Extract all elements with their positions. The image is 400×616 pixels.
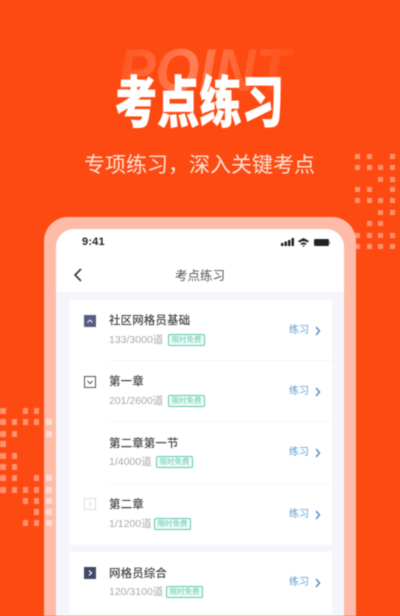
- arrow: [315, 448, 321, 458]
- row: 社区网格员基础: 练习: [289, 325, 309, 336]
- arrow: [315, 326, 321, 336]
- card: 网格员综合: 120/3100道: [109, 586, 163, 598]
- row: 社区网格员基础: [83, 314, 321, 347]
- row: 第一章: 练习: [289, 386, 309, 397]
- row: 第二章第一节: 限时免费: [160, 457, 190, 466]
- row: 第二章: 1/1200道: [109, 518, 152, 530]
- card: 网格员综合: 网格员综合: [109, 568, 167, 580]
- arrow: [315, 510, 321, 520]
- row: 第一章: 201/2600道: [109, 395, 163, 407]
- row: 第二章: [84, 498, 321, 531]
- phone screen: [56, 229, 344, 616]
- phone frame: [44, 217, 356, 616]
- card: 网格员综合: 练习: [289, 577, 309, 588]
- row: 第二章第一节: 1/4000道: [109, 456, 152, 468]
- card: 网格员综合: 限时免费: [170, 587, 200, 596]
- row: 第二章: 第二章: [109, 499, 144, 511]
- icon: expand: [83, 375, 97, 389]
- arrow: [315, 387, 321, 397]
- title: 考点练习: [115, 59, 284, 140]
- row: 第二章第一节: 练习: [289, 447, 309, 458]
- status icons: [280, 237, 331, 248]
- row: 社区网格员基础: 133/3000道: [109, 334, 163, 346]
- card: 社区网格员基础 chapters: [69, 300, 332, 545]
- icon: collapse: [83, 314, 97, 328]
- card: 网格员综合: [69, 552, 332, 614]
- row: 第一章: 第一章: [109, 376, 144, 388]
- row: 第一章: 限时免费: [172, 396, 202, 405]
- frame dots overlay: [46, 418, 52, 526]
- row: 社区网格员基础: 社区网格员基础: [109, 315, 190, 327]
- row: 第二章: 限时免费: [158, 519, 188, 528]
- row: 第二章第一节: 第二章第一节: [109, 438, 179, 450]
- row: 第二章第一节: [109, 436, 321, 469]
- back arrow: [73, 268, 82, 282]
- subtitle: 专项练习，深入关键考点: [84, 149, 315, 179]
- row: 第二章: 练习: [289, 509, 309, 520]
- page title: 考点练习: [175, 269, 225, 283]
- icon: disabled: [84, 498, 96, 510]
- row: 社区网格员基础: 限时免费: [172, 335, 202, 344]
- status time: 9:41: [82, 236, 105, 248]
- ghost word POINT: POINT: [118, 37, 294, 104]
- arrow: [315, 578, 321, 588]
- row: 第一章: [83, 374, 321, 408]
- navigation header: [56, 229, 344, 292]
- icon: expand dark: [83, 566, 97, 580]
